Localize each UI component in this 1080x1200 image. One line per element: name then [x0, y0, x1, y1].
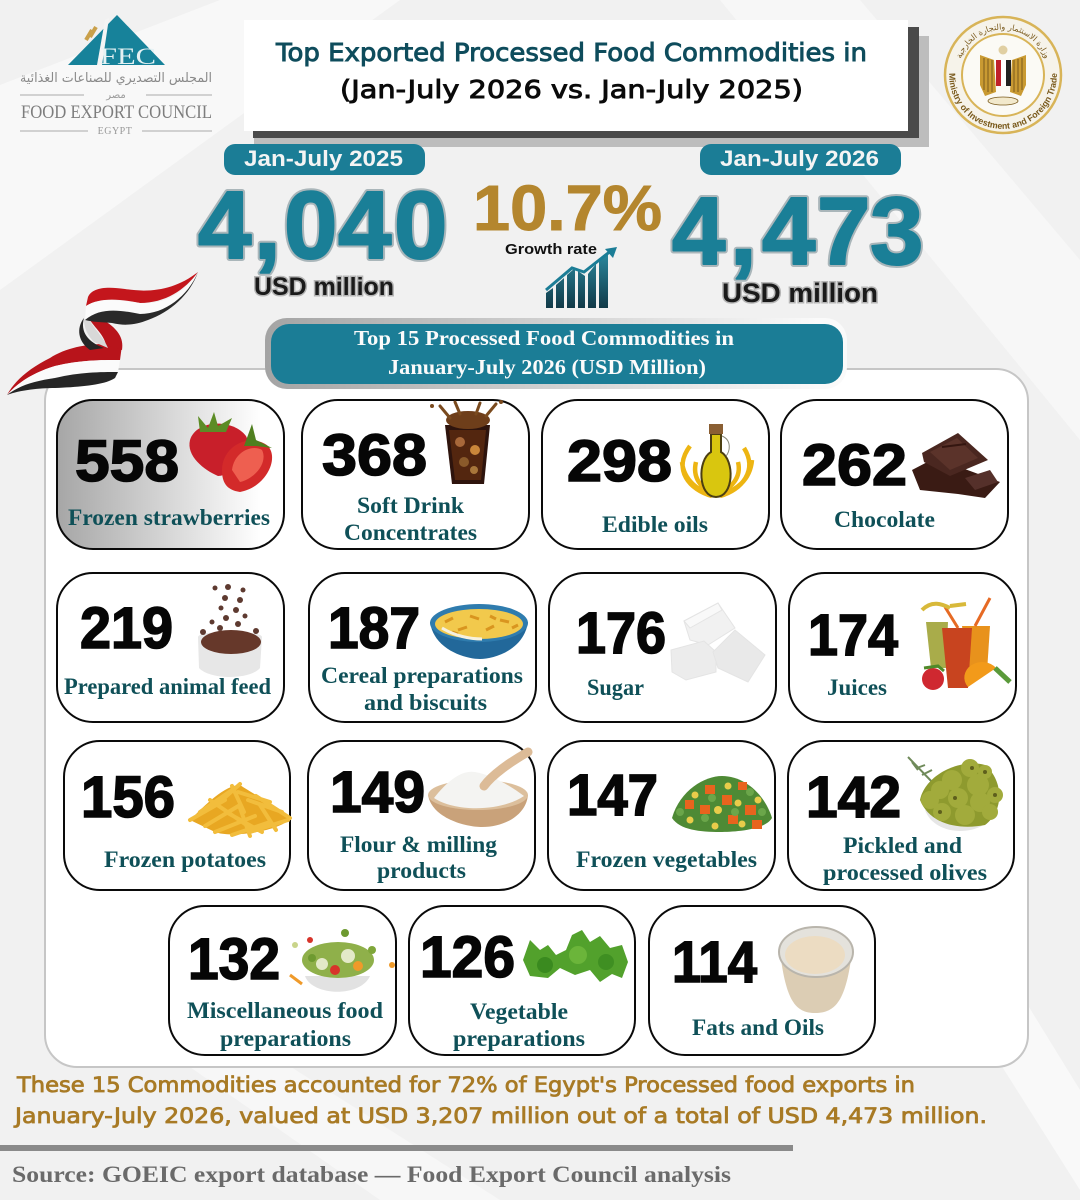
card: Juices: Juices: [827, 675, 887, 700]
card: Miscellaneous food preparations: Miscellaneous food: [187, 998, 383, 1023]
icon: glass jar: [779, 927, 853, 1013]
value 2026: 4,473: [672, 178, 923, 285]
logo: Food Export Council: مصر: [105, 90, 126, 101]
card: Sugar: 176: [576, 601, 666, 666]
summary text: January-July 2026, valued at USD 3,207 million out of a total of USD 4,473 million.: [13, 1104, 987, 1128]
value 2026: 4,473: [672, 178, 923, 285]
unit 2026: USD million: [722, 278, 878, 308]
value 2025: 4,040: [198, 172, 447, 279]
icon: oil bottle: [682, 424, 752, 497]
icon: fries: [190, 784, 290, 836]
icon: salad bowl: [290, 929, 395, 992]
card: Frozen potatoes: [64, 741, 290, 890]
card: Chocolate: Chocolate: [834, 507, 935, 532]
card: Pickled and processed olives: Pickled and: [843, 833, 962, 858]
ministry seal: Ministry of Investment and Foreign Trade: [949, 73, 1057, 129]
card: Sugar: [549, 573, 776, 722]
card: Flour & milling products: products: [377, 858, 466, 883]
logo: Food Export Council: EGYPT: [98, 126, 132, 137]
unit 2025: USD million: [254, 273, 394, 301]
ribbon: Egyptian flag: [7, 272, 198, 395]
card: Flour & milling products: [308, 741, 535, 890]
icon: growth chart: [546, 247, 617, 308]
card: Frozen potatoes: 156: [81, 765, 175, 830]
icon: animal feed bowl: [198, 584, 262, 677]
card: Frozen vegetables: 147: [567, 763, 658, 828]
summary text: These 15 Commodities accounted for 72% of Egypt's Processed food exports in: [16, 1073, 915, 1097]
logo: Food Export Council: FOOD EXPORT COUNCIL: [21, 102, 212, 123]
icon: olives: [908, 757, 1003, 831]
card: Chocolate: 262: [802, 433, 907, 498]
icon: mixed vegetables: [672, 776, 772, 832]
card: Juices: [789, 573, 1016, 722]
icon: cola glass: [430, 400, 503, 484]
title line 2: (Jan-July 2026 vs. Jan-July 2025): [340, 75, 803, 104]
source note: Source: GOEIC export database — Food Export Council analysis: [12, 1162, 731, 1187]
card: Chocolate: [781, 400, 1008, 549]
card: Flour & milling products: Flour & milling: [340, 832, 498, 857]
card: Soft Drink Concentrates: Concentrates: [344, 520, 477, 545]
card: Edible oils: [542, 400, 769, 549]
card: Miscellaneous food preparations: 132: [188, 927, 280, 992]
card: Prepared animal feed: 219: [80, 596, 173, 661]
pill: Jan-July 2026: Jan-July 2026: [720, 146, 879, 171]
card: Sugar: Sugar: [587, 675, 644, 700]
card: Pickled and processed olives: [788, 741, 1014, 890]
card: Fats and Oils: [649, 906, 875, 1055]
card: Fats and Oils: Fats and Oils: [692, 1015, 824, 1040]
pill: Jan-July 2025: Jan-July 2025: [244, 146, 403, 171]
card: Edible oils: 298: [567, 429, 672, 494]
title panel: [244, 20, 929, 147]
card: Edible oils: Edible oils: [602, 512, 708, 537]
card: Cereal preparations and biscuits: and biscuits: [364, 690, 487, 715]
card: Fats and Oils: 114: [672, 930, 757, 995]
icon: flour bowl: [428, 752, 528, 827]
card: Cereal preparations and biscuits: [309, 573, 536, 722]
card: Miscellaneous food preparations: [169, 906, 396, 1055]
card: Prepared animal feed: Prepared animal feed: [64, 674, 271, 699]
card: Soft Drink Concentrates: [302, 400, 529, 549]
card: Frozen strawberries: [57, 400, 284, 549]
card: Vegetable preparations: [409, 906, 635, 1055]
logo: Food Export Council: FEC: [100, 44, 156, 69]
icon: leafy greens: [523, 930, 628, 982]
icon: juice glasses: [922, 598, 1010, 690]
card: Frozen vegetables: [548, 741, 775, 890]
card: Pickled and processed olives: 142: [806, 765, 901, 830]
card: Frozen vegetables: Frozen vegetables: [576, 847, 757, 872]
ministry seal: وزارة الاستثمار والتجارة الخارجية: [958, 24, 1047, 58]
banner: top 15 heading: Top 15 Processed Food Commodities in: [354, 326, 734, 350]
card: Frozen potatoes: Frozen potatoes: [104, 847, 266, 872]
card: Cereal preparations and biscuits: Cereal preparations: [321, 663, 523, 688]
summary text: [13, 1073, 987, 1128]
card: Flour & milling products: 149: [330, 760, 425, 825]
icon: strawberries: [189, 412, 272, 492]
card: Soft Drink Concentrates: Soft Drink: [357, 493, 464, 518]
card: Frozen strawberries: 558: [75, 429, 179, 494]
card: Frozen strawberries: Frozen strawberries: [68, 505, 270, 530]
card: Vegetable preparations: preparations: [453, 1026, 585, 1051]
icon: cereal bowl: [430, 604, 528, 659]
growth rate value: 10.7%: [473, 172, 662, 244]
card: Prepared animal feed: [57, 573, 284, 722]
card: Vegetable preparations: Vegetable: [470, 999, 568, 1024]
banner: top 15 heading: [265, 318, 847, 389]
panel: commodity cards: [45, 318, 1028, 1067]
icon: chocolate: [912, 433, 1000, 498]
card: Soft Drink Concentrates: 368: [322, 423, 427, 488]
pill: Jan-July 2025: [224, 144, 425, 175]
icon: sugar cubes: [671, 603, 765, 682]
pill: Jan-July 2026: [700, 144, 901, 175]
card: Vegetable preparations: 126: [420, 925, 515, 990]
banner: top 15 heading: January-July 2026 (USD Million): [388, 355, 706, 379]
card: Miscellaneous food preparations: preparations: [220, 1026, 351, 1051]
card: Pickled and processed olives: processed olives: [823, 860, 987, 885]
logo: Food Export Council: [20, 15, 212, 137]
value 2025: 4,040: [198, 172, 447, 279]
card: Juices: 174: [808, 603, 898, 668]
title line 1: Top Exported Processed Food Commodities in: [275, 38, 867, 67]
growth rate label: Growth rate: [505, 242, 597, 258]
card: Cereal preparations and biscuits: 187: [328, 596, 420, 661]
ministry seal: [944, 16, 1062, 134]
logo: Food Export Council: المجلس التصديري للصناعات الغذائية: [20, 71, 212, 86]
